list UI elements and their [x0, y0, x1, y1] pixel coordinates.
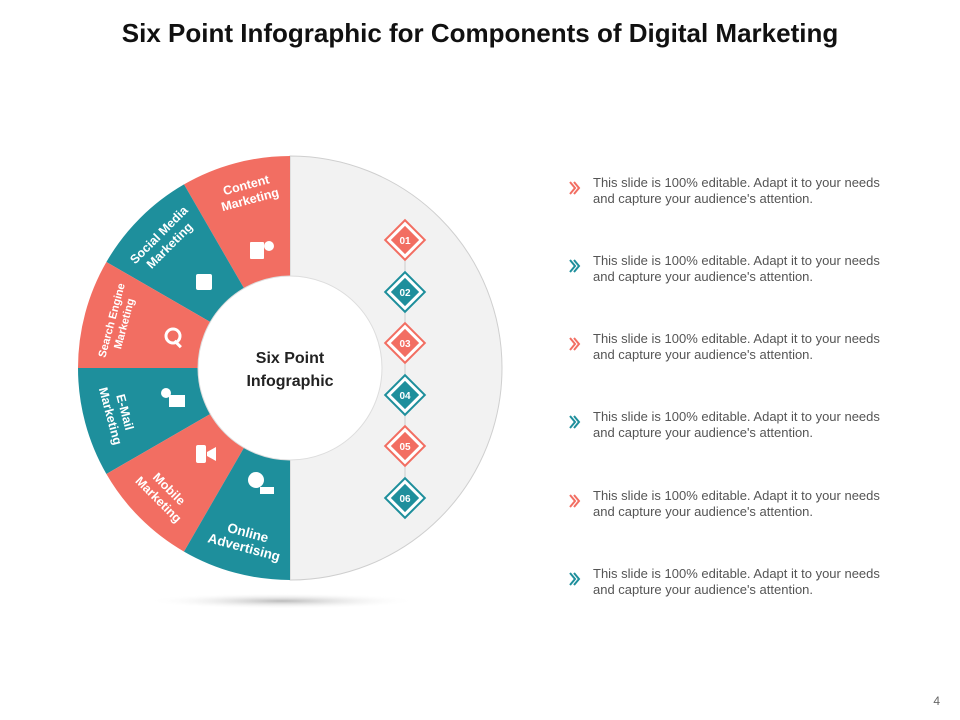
number diamonds: 04	[399, 391, 411, 402]
center circle	[198, 276, 382, 460]
segment labels: Marketing	[220, 185, 280, 214]
text item 2	[569, 253, 880, 284]
segment: search engine marketing	[78, 262, 210, 368]
text item 4: This slide is 100% editable. Adapt it to your needs	[593, 409, 880, 424]
text item 2: and capture your audience's attention.	[593, 269, 813, 284]
segment labels: Search Engine	[97, 282, 128, 359]
segment: social media marketing	[106, 184, 244, 322]
text item 6	[569, 566, 880, 597]
segment: e-mail marketing	[78, 368, 210, 474]
center circle: Six Point	[256, 350, 325, 367]
icons	[161, 241, 274, 494]
segment labels: Mobile	[150, 470, 188, 508]
page number: 4	[933, 694, 940, 708]
text item 5: and capture your audience's attention.	[593, 504, 813, 519]
segment: content marketing	[184, 156, 290, 288]
segment: online advertising	[184, 448, 290, 580]
text item 2: This slide is 100% editable. Adapt it to your needs	[593, 253, 880, 268]
number diamonds: 01	[399, 236, 411, 247]
text item 3	[569, 331, 880, 362]
text item 1: and capture your audience's attention.	[593, 191, 813, 206]
segment labels: E-Mail	[113, 393, 136, 432]
donut chart	[78, 156, 502, 606]
text item 4	[569, 409, 880, 440]
text item 4: and capture your audience's attention.	[593, 425, 813, 440]
text item 5: This slide is 100% editable. Adapt it to your needs	[593, 488, 880, 503]
title: Six Point Infographic for Components of Digital Marketing	[122, 18, 838, 48]
number diamonds: 05	[399, 442, 411, 453]
segment labels: Marketing	[112, 297, 137, 350]
number diamonds: 02	[399, 288, 411, 299]
text item 5	[569, 488, 880, 519]
segment labels: Content	[222, 172, 272, 198]
text item 6: and capture your audience's attention.	[593, 582, 813, 597]
segment labels: Online	[226, 520, 271, 546]
text item 6: This slide is 100% editable. Adapt it to your needs	[593, 566, 880, 581]
segment labels	[96, 171, 286, 564]
segment labels: Advertising	[206, 530, 282, 564]
number diamonds: 03	[399, 339, 411, 350]
text item 3: and capture your audience's attention.	[593, 347, 813, 362]
text item 1: This slide is 100% editable. Adapt it to your needs	[593, 175, 880, 190]
segment labels: Marketing	[133, 474, 184, 525]
segment labels: Social Media	[127, 203, 192, 267]
segment: mobile marketing	[106, 414, 244, 552]
segment labels: Marketing	[96, 386, 125, 446]
number diamonds: 06	[399, 494, 411, 505]
center circle: Infographic	[246, 373, 334, 390]
text item 1	[569, 175, 880, 206]
number diamonds	[385, 220, 425, 518]
text item 3: This slide is 100% editable. Adapt it to your needs	[593, 331, 880, 346]
segment labels: Marketing	[144, 220, 195, 271]
